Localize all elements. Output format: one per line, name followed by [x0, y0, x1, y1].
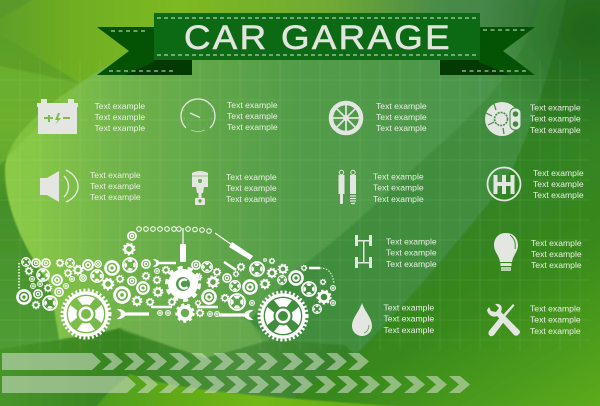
icon: gauge [181, 99, 215, 132]
text: wheel: Text example [376, 112, 427, 122]
arrow strip: bottom [2, 376, 470, 393]
text: speaker: Text example [90, 192, 141, 202]
text: crossed tools: Text example [530, 314, 581, 324]
text: battery: Text example [94, 123, 145, 133]
ribbon folds [125, 60, 510, 75]
lower gear [176, 304, 194, 322]
icon: wheel [331, 103, 361, 133]
text: oil drop: Text example [384, 314, 434, 324]
icon: battery [37, 99, 78, 134]
banner [97, 13, 535, 75]
text: gauge: Text example [227, 122, 278, 132]
icon: shock absorbers [338, 170, 356, 204]
text: piston: Text example [226, 194, 277, 204]
icon: piston [192, 171, 208, 205]
text: piston: Text example [226, 183, 277, 193]
text: crossed tools: Text example [530, 304, 581, 314]
grid [0, 60, 590, 350]
text: gauge: Text example [227, 111, 278, 121]
text: shock absorbers: Text example [373, 194, 424, 204]
text: chassis axle: Text example [386, 248, 437, 258]
text: wheel: Text example [376, 123, 427, 133]
centre gear with wrench [166, 268, 200, 300]
text: wheel: Text example [376, 101, 427, 111]
text: oil drop: Text example [384, 302, 434, 312]
text: gauge: Text example [227, 100, 278, 110]
text: light bulb: Text example [531, 260, 582, 270]
car made of gears [17, 227, 335, 340]
screwdrivers [19, 228, 334, 290]
icon: oil drop [352, 303, 372, 336]
text: oil drop: Text example [384, 325, 434, 335]
text: brake disc: Text example [530, 114, 581, 124]
text: brake disc: Text example [530, 125, 581, 135]
text: gear shifter: Text example [533, 190, 584, 200]
right ribbon tail [440, 27, 535, 75]
icon: light bulb [494, 233, 518, 271]
front wheel [259, 292, 307, 340]
arrow strip: top [2, 353, 369, 370]
body gears [17, 258, 335, 317]
text: light bulb: Text example [531, 238, 582, 248]
text: battery: Text example [94, 112, 145, 122]
text: shock absorbers: Text example [373, 182, 424, 192]
text: light bulb: Text example [531, 249, 582, 259]
text: battery: Text example [94, 101, 145, 111]
text: speaker: Text example [90, 181, 141, 191]
text: crossed tools: Text example [530, 326, 581, 336]
icon: chassis axle [355, 235, 372, 268]
icon: gear shifter [488, 168, 520, 200]
roof pillar and chain [123, 227, 211, 255]
icon: crossed tools [487, 304, 520, 336]
text: brake disc: Text example [530, 102, 581, 112]
icon: speaker [40, 170, 78, 202]
text: chassis axle: Text example [386, 236, 437, 246]
text: gear shifter: Text example [533, 168, 584, 178]
text: shock absorbers: Text example [373, 172, 424, 182]
left ribbon tail [97, 27, 192, 75]
text: speaker: Text example [90, 170, 141, 180]
icon: brake disc [485, 102, 521, 136]
text: gear shifter: Text example [533, 179, 584, 189]
wrenches [117, 259, 254, 320]
text: piston: Text example [226, 172, 277, 182]
title: CAR GARAGE [184, 19, 450, 57]
text: chassis axle: Text example [386, 259, 437, 269]
rear wheel [62, 290, 110, 338]
